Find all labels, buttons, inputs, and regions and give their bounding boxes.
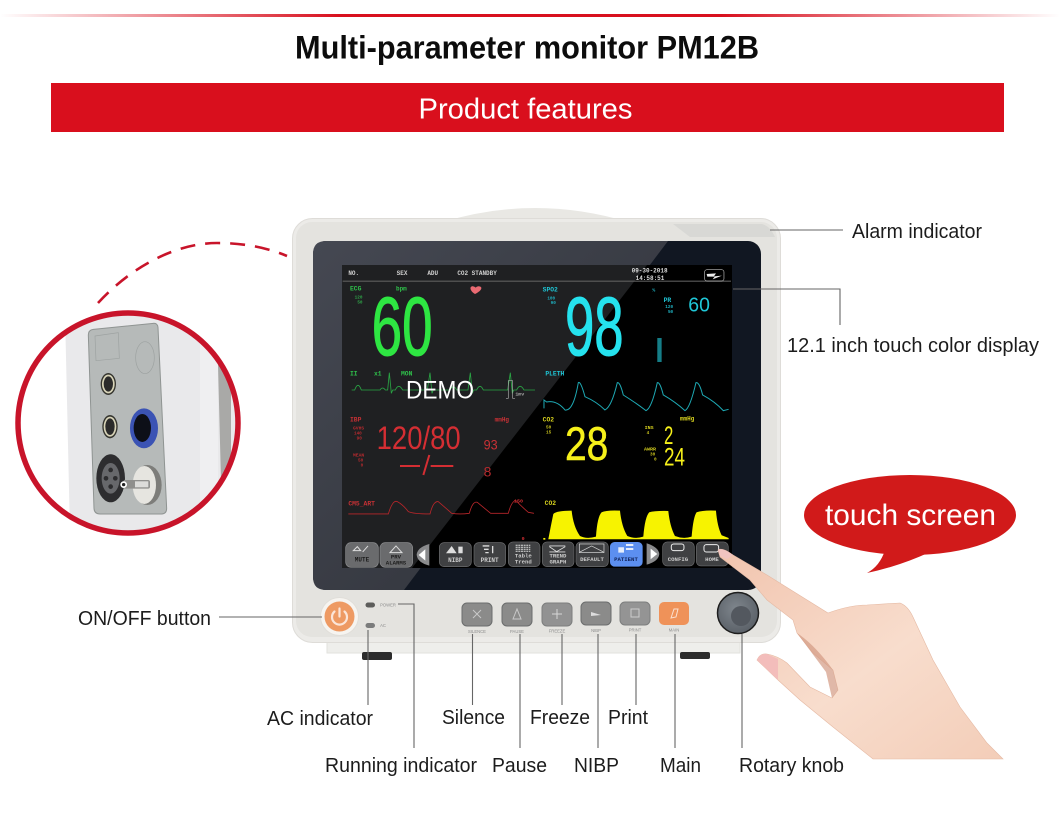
CO2 readout: 50 (546, 426, 552, 431)
CO2 readout: 28 (565, 418, 608, 471)
SpO2 readout (543, 280, 710, 373)
status bar: 09-30-2018 (632, 267, 668, 274)
hard key: NIBP: NIBP (591, 628, 601, 633)
label: main: Main (660, 755, 701, 777)
alarm indicator strip (673, 224, 775, 237)
label: nibp: NIBP (574, 755, 619, 777)
callout: touch screen (804, 475, 1016, 573)
ECG readout: 60 (372, 280, 433, 373)
feet (362, 652, 392, 660)
jack 2 (102, 415, 118, 438)
pleth waveform (544, 370, 729, 411)
button: table trend (508, 542, 540, 567)
IBP readout: 8 (484, 464, 492, 480)
label: running indicator: Running indicator (325, 755, 477, 777)
button: mute (346, 543, 378, 567)
SpO2 readout: 100 (547, 296, 556, 301)
SpO2 readout: % (652, 288, 655, 294)
button: print (474, 543, 506, 567)
leader lines (219, 230, 843, 748)
IBP waveform: 150 (514, 499, 523, 505)
button: table trend: Table (515, 553, 532, 560)
button: config (663, 542, 694, 566)
DEMO watermark: DEMO (406, 376, 474, 404)
SpO2 readout: 98 (565, 280, 624, 373)
CO2 readout: CO2 (543, 416, 554, 423)
button: home: HOME (705, 556, 719, 563)
label: print: Print (608, 707, 648, 729)
button: mute: MUTE (355, 557, 370, 564)
touch menu buttons (346, 542, 728, 567)
CO2 waveform: CO2 (545, 500, 556, 507)
button: table trend: Trend (515, 559, 532, 566)
SpO2 readout: 90 (551, 301, 556, 306)
LED indicators: AC (380, 623, 386, 628)
IBP readout: 0 (361, 464, 364, 469)
dashed arc linking inset to monitor (98, 243, 287, 303)
LED indicators: POWER (380, 602, 396, 608)
IBP readout: IBP (350, 416, 362, 423)
status bar: NO. (348, 270, 359, 277)
label: pause: Pause (492, 755, 547, 777)
CO2 readout: 24 (664, 445, 685, 472)
connector plate (88, 323, 167, 514)
hard key: print: PRINT (629, 628, 642, 632)
ECG readout: 120 (355, 296, 363, 301)
status bar (343, 267, 731, 282)
banner: product features: Product features (418, 94, 632, 126)
left arrow (417, 544, 429, 566)
blue socket (130, 408, 158, 448)
CO2 readout: INS (645, 425, 654, 431)
ECG readout: 50 (357, 300, 363, 305)
button: trend graph (542, 542, 574, 567)
IBP waveform: CM5_ART (348, 500, 375, 507)
button: home (696, 542, 728, 566)
button: nibp (439, 543, 471, 567)
IBP readout: mmHg (495, 417, 509, 424)
CO2 readout: mmHg (680, 416, 695, 423)
ECG readout: bpm (396, 286, 407, 293)
CO2 readout (543, 416, 695, 472)
label: rotary knob: Rotary knob (739, 755, 844, 777)
button: pre alarms (380, 543, 413, 567)
jack 1 (101, 373, 116, 395)
button: trend graph: GRAPH (549, 559, 567, 566)
IBP readout: 140 (354, 431, 362, 436)
SpO2 readout: 50 (668, 310, 674, 315)
thumbnail (757, 654, 778, 680)
display (342, 265, 732, 568)
hard key: freeze: FREEZE (549, 628, 565, 634)
IBP readout: 93 (484, 437, 498, 453)
label: silence: Silence (442, 707, 505, 729)
CO2 readout: 0 (654, 457, 657, 462)
button: pre alarms: PRV (391, 553, 402, 560)
fingernail (718, 549, 733, 559)
button: pre alarms: ALARMS (386, 559, 407, 566)
CO2 waveform (543, 500, 729, 540)
casing (292, 218, 780, 642)
banner: product features (51, 83, 1004, 132)
IBP waveform (348, 499, 534, 542)
IBP waveform: 0 (522, 536, 525, 542)
hard key: main: MAIN (669, 628, 679, 632)
monitor (292, 208, 780, 660)
status bar: SEX (397, 270, 408, 277)
ECG waveform: x1 (374, 370, 382, 377)
CO2 readout: 15 (546, 431, 552, 436)
IBP readout: 120/80 (377, 420, 461, 456)
button: trend graph: TREND (549, 553, 567, 560)
hard key: pause: PAUSE (510, 629, 524, 634)
power button (320, 598, 358, 636)
inset: rear connector panel (18, 313, 240, 533)
rotary knob (718, 592, 758, 634)
monitor side casing (65, 313, 240, 533)
hard key: silence: SILENCE (468, 629, 486, 634)
hand pointing at screen (718, 549, 1003, 759)
ECG waveform (350, 370, 535, 398)
handle (443, 208, 628, 222)
status bar: 14:58:51 (636, 275, 665, 282)
hard key: pause (502, 603, 532, 634)
label: freeze: Freeze (530, 707, 590, 729)
button: default (576, 542, 608, 567)
status bar: CO2 STANDBY (457, 270, 497, 277)
button: config: CONFIG (668, 556, 689, 563)
label: on/off button: ON/OFF button (78, 608, 211, 630)
title: Multi-parameter monitor PM12B (295, 30, 759, 66)
button: print: PRINT (481, 557, 499, 564)
round ECG connector (96, 454, 125, 502)
button: patient (610, 542, 643, 567)
ECG waveform: 1mv (515, 391, 524, 397)
right arrow (647, 543, 659, 565)
IBP readout: MEAN (353, 453, 364, 459)
IBP readout (350, 416, 509, 480)
ECG waveform: II (350, 370, 358, 377)
IBP readout: 90 (357, 436, 362, 441)
SpO2 readout: PR (664, 297, 671, 304)
IBP readout: GVHS (353, 425, 364, 431)
CO2 readout: AWRR (644, 446, 656, 452)
hard key: freeze (542, 603, 572, 634)
callout: touch screen: touch screen (825, 499, 996, 532)
CO2 readout: 4 (647, 431, 650, 436)
SpO2 readout: 120 (665, 305, 673, 310)
ECG readout: ECG (350, 286, 362, 293)
label: display: 12.1 inch touch color display (787, 335, 1039, 357)
hard key: silence (462, 603, 492, 634)
button: patient: PATIENT (614, 556, 638, 563)
label: ac indicator: AC indicator (267, 708, 373, 730)
pleth waveform: PLETH (545, 370, 565, 377)
hard key: print (620, 602, 650, 632)
hard key: NIBP (581, 602, 611, 633)
ECG waveform: MON (401, 370, 413, 377)
bottom strip (327, 636, 740, 653)
bezel (313, 241, 761, 590)
button: default: DEFAULT (580, 556, 604, 563)
CO2 readout: 30 (650, 452, 656, 457)
LED indicators (366, 602, 396, 628)
top decorative red line (0, 14, 1060, 17)
SpO2 readout: 60 (688, 293, 710, 316)
hard key: main (659, 602, 689, 632)
button: nibp: NIBP (448, 557, 463, 564)
label: alarm indicator: Alarm indicator (852, 221, 982, 243)
finger crease (797, 633, 838, 698)
IBP readout: 50 (358, 459, 364, 464)
status bar: ADU (427, 270, 439, 277)
metal plug (142, 465, 162, 505)
CO2 readout: 2 (664, 423, 673, 450)
SpO2 readout: SPO2 (543, 286, 558, 293)
